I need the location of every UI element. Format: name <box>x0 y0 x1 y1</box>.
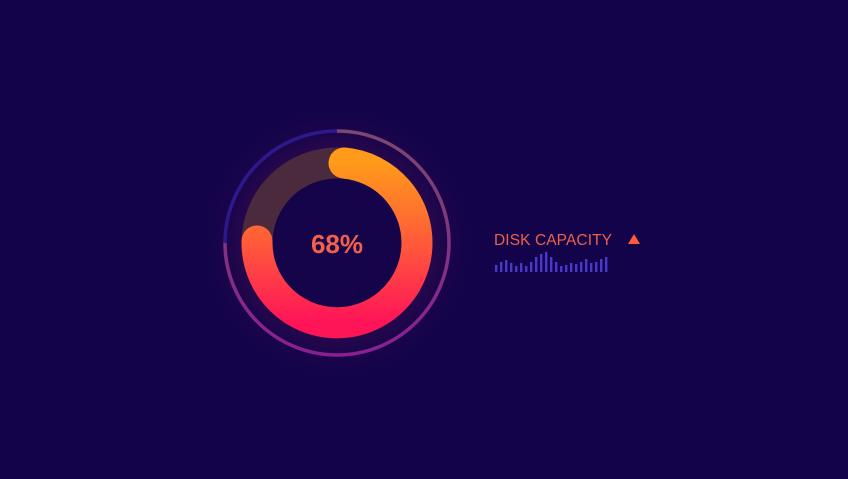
label: disk capacity: DISK CAPACITY <box>494 232 612 249</box>
center value: 68% <box>311 229 363 259</box>
donut chart: 68% <box>257 163 417 323</box>
mini bar chart <box>495 252 607 272</box>
icon: up triangle <box>628 234 640 244</box>
outer ring <box>225 131 449 355</box>
